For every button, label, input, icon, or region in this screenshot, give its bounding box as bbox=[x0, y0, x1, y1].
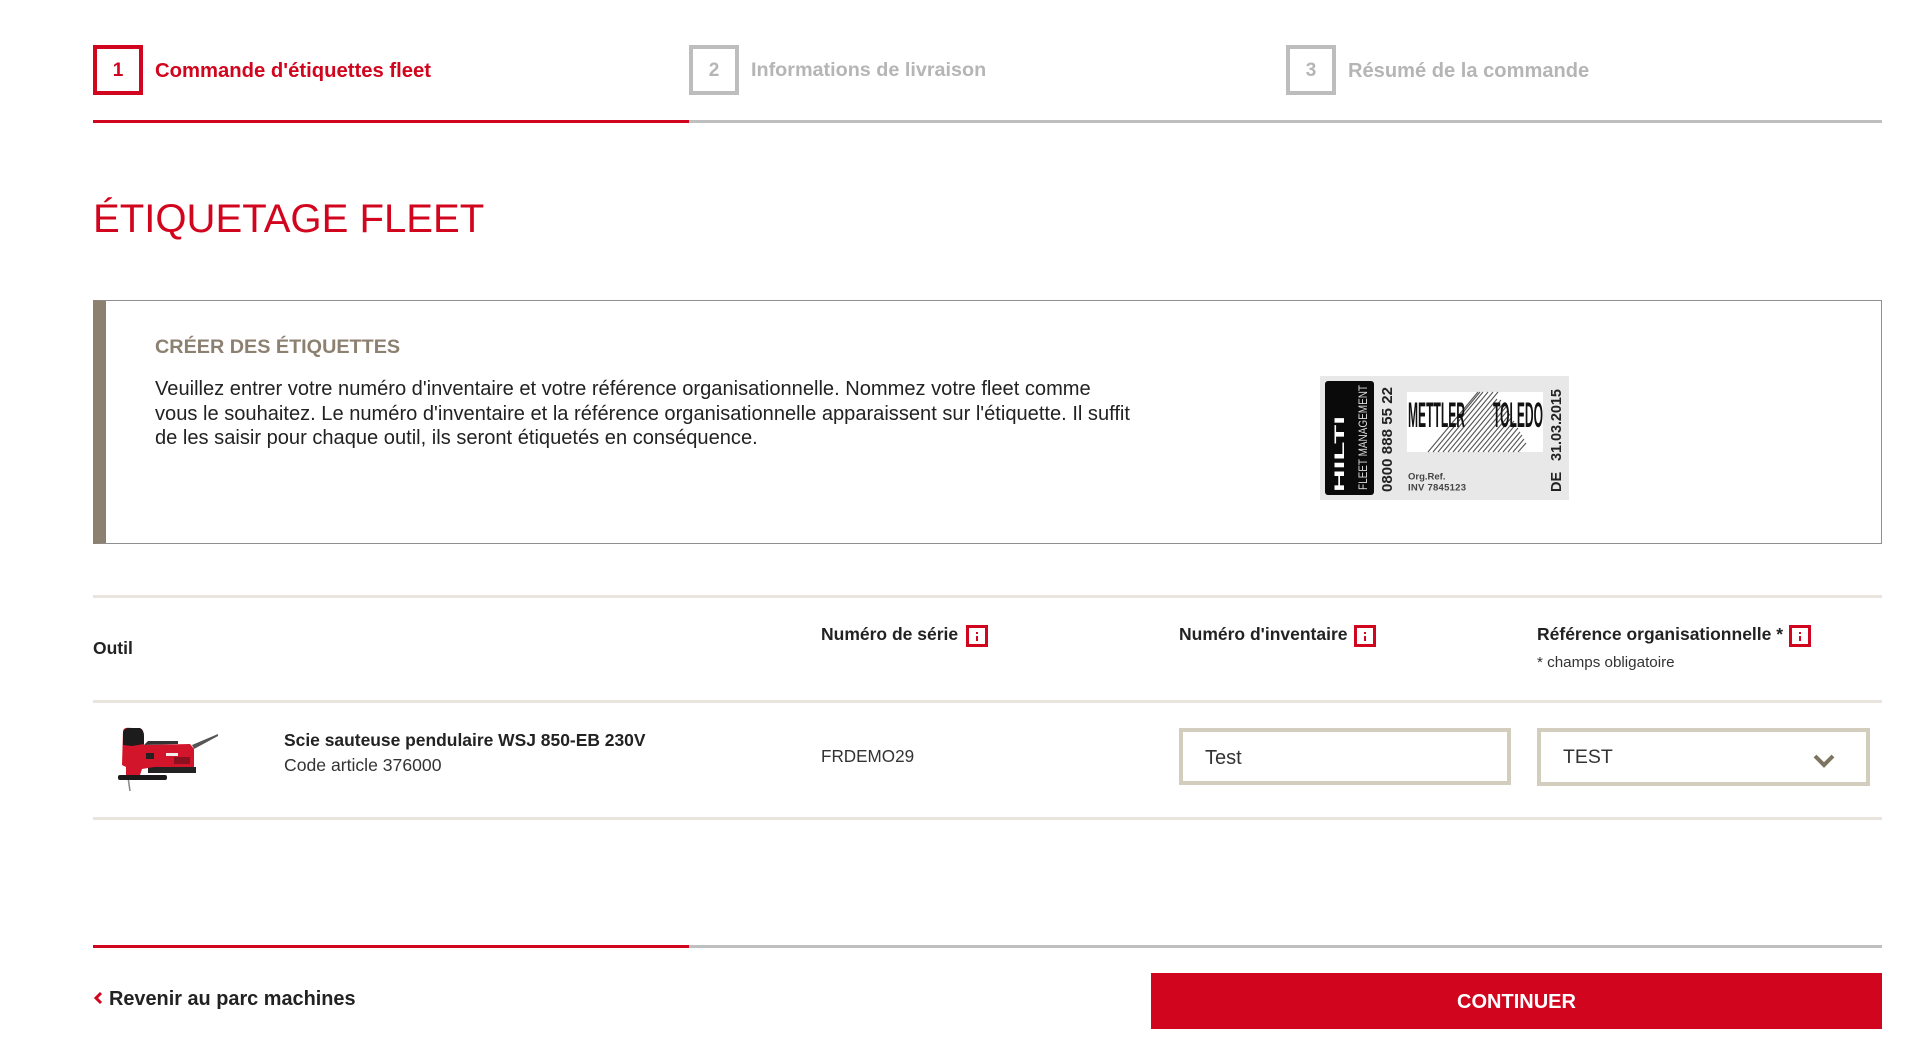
step 3 number box bbox=[1286, 45, 1336, 95]
Mettler Toledo logo: METTLER bbox=[1408, 396, 1465, 435]
step 1 label: Commande d'étiquettes fleet bbox=[155, 60, 431, 82]
step 2 label: Informations de livraison bbox=[751, 59, 986, 81]
step 1: active bbox=[93, 45, 431, 95]
step 1 number box: 1 bbox=[113, 60, 123, 81]
icon: jigsaw tool bbox=[118, 728, 218, 792]
org reference: Org.Ref. bbox=[1408, 472, 1445, 482]
select: organisational reference bbox=[1537, 728, 1870, 786]
panel heading: CRÉER DES ÉTIQUETTES bbox=[155, 336, 400, 358]
black Hilti strip bbox=[1325, 381, 1374, 495]
continue button: CONTINUER bbox=[1457, 991, 1576, 1013]
title: ÉTIQUETAGE FLEET bbox=[93, 197, 484, 241]
label sample image bbox=[1320, 376, 1569, 500]
icon: chevron left bbox=[94, 992, 102, 1004]
panel body text: de les saisir pour chaque outil, ils seront étiquetés en conséquence. bbox=[155, 427, 758, 449]
step 3 label: Résumé de la commande bbox=[1348, 60, 1589, 82]
step 2 number box: 2 bbox=[709, 60, 719, 81]
rule under row bbox=[93, 817, 1882, 820]
step 3 number box: 3 bbox=[1306, 60, 1316, 81]
tool name: Scie sauteuse pendulaire WSJ 850-EB 230V bbox=[284, 730, 646, 750]
table top rule bbox=[93, 595, 1882, 598]
progress bar: top bbox=[93, 120, 1882, 123]
input: inventory number bbox=[1179, 728, 1511, 785]
column header: tool: Outil bbox=[93, 638, 133, 658]
column header: organisational reference: Référence organisationnelle * bbox=[1537, 624, 1783, 644]
panel body text bbox=[155, 378, 1130, 449]
phone number: 0800 888 55 22 bbox=[1379, 387, 1396, 492]
serial value: FRDEMO29 bbox=[821, 747, 914, 766]
icon: info bbox=[966, 625, 988, 647]
panel body text: vous le souhaitez. Le numéro d'inventaire et la référence organisationnelle apparaissent sur l'étiquette. Il suffit bbox=[155, 403, 1130, 425]
step 2 number box bbox=[689, 45, 739, 95]
step 3: inactive bbox=[1286, 45, 1589, 95]
input: inventory number: Test bbox=[1205, 747, 1242, 769]
column header: inventory number: Numéro d'inventaire bbox=[1179, 624, 1348, 644]
column header: organisational reference bbox=[1537, 624, 1811, 671]
continue button bbox=[1151, 973, 1882, 1029]
label sample image: INV 7845123 bbox=[1408, 482, 1466, 494]
column header: serial number: Numéro de série bbox=[821, 624, 958, 644]
date: 31.03.2015 bbox=[1549, 389, 1565, 461]
step 2: inactive bbox=[689, 45, 986, 95]
back link: Revenir au parc machines bbox=[109, 988, 356, 1010]
icon: chevron down bbox=[1814, 754, 1834, 768]
Mettler Toledo logo bbox=[1407, 392, 1543, 452]
panel body text: Veuillez entrer votre numéro d'inventaire et votre référence organisationnelle. Nommez votre fleet comme bbox=[155, 378, 1091, 400]
required note: * champs obligatoire bbox=[1537, 654, 1675, 671]
progress bar: bottom bbox=[93, 945, 1882, 948]
icon: info bbox=[1789, 625, 1811, 647]
panel: create labels bbox=[93, 300, 1882, 544]
article code: Code article 376000 bbox=[284, 755, 441, 775]
step 1 number box bbox=[93, 45, 143, 95]
rule under header bbox=[93, 700, 1882, 703]
select: organisational reference: TEST bbox=[1563, 746, 1613, 768]
country code: DE bbox=[1549, 472, 1565, 492]
icon: info bbox=[1354, 625, 1376, 647]
black Hilti strip: HILTI bbox=[1331, 416, 1347, 492]
